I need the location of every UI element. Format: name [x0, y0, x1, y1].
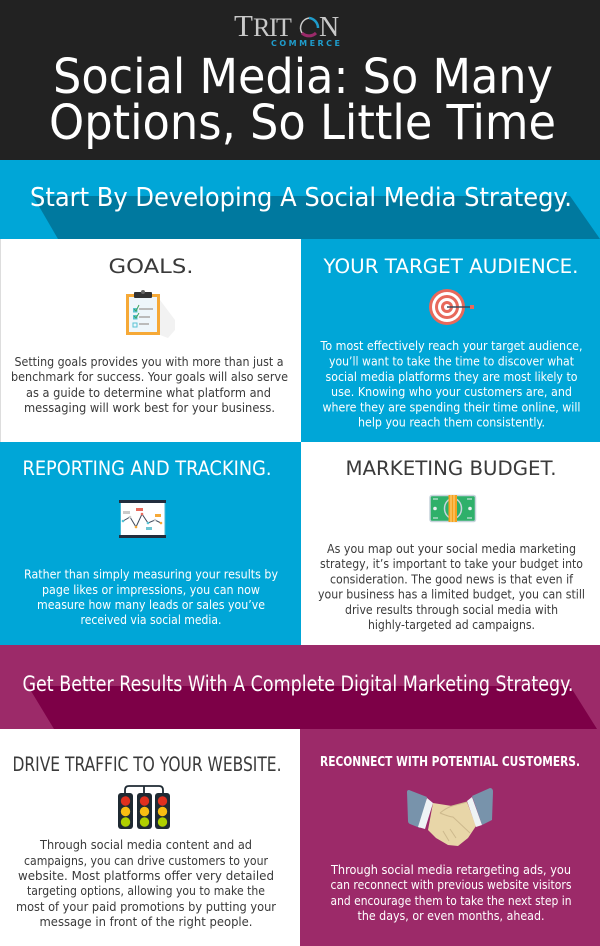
text: reporting and tracking: measure how many leads or sales you’ve [37, 597, 265, 612]
text: goals: benchmark for success. Your goals will also serve [11, 369, 288, 384]
text: drive traffic: campaigns, you can drive customers to your [24, 853, 269, 868]
panel: drive traffic [0, 729, 300, 946]
panel: target audience [301, 239, 600, 442]
text: marketing budget: As you map out your social media marketing [327, 541, 576, 556]
banner: digital marketing [0, 645, 600, 729]
logo: N [319, 12, 339, 43]
panel: reconnect [300, 729, 600, 946]
text: target audience [320, 338, 582, 430]
text: reconnect [330, 862, 572, 923]
logo: RIT [253, 13, 292, 42]
text: marketing budget: consideration. The good news is that even if [330, 572, 574, 586]
panel: marketing budget [301, 442, 600, 645]
heading: marketing budget: MARKETING BUDGET. [346, 457, 556, 480]
logo: T [234, 8, 253, 43]
text: drive traffic: most of your paid promotions by putting your [16, 899, 277, 914]
text: reporting and tracking [24, 566, 279, 627]
icon: handshake [407, 788, 493, 846]
title: Options, So Little Time [49, 95, 556, 151]
text: drive traffic: message in front of the right people. [40, 914, 252, 929]
icon: traffic lights [118, 786, 170, 829]
text: reporting and tracking: Rather than simply measuring your results by [24, 566, 279, 582]
heading: reporting and tracking: REPORTING AND TRACKING. [22, 457, 272, 480]
text: reporting and tracking: received via social media. [80, 612, 222, 627]
banner: strategy: Start By Developing A Social Media Strategy. [30, 183, 572, 213]
text: reconnect: the days, or even months, ahead. [358, 908, 544, 923]
title: Social Media: So Many [53, 49, 553, 105]
text: marketing budget: highly-targeted ad campaigns. [368, 617, 535, 632]
text: drive traffic: website. Most platforms offer very detailed [18, 868, 274, 883]
icon: target [429, 289, 474, 325]
text: goals [11, 354, 288, 415]
heading: goals: GOALS. [108, 255, 194, 278]
text: drive traffic [16, 837, 277, 929]
text: target audience: use. Knowing who your customers are, and [331, 384, 572, 399]
panel: reporting and tracking [0, 442, 301, 645]
text: drive traffic: targeting options, allowing you to make the [27, 883, 265, 898]
title [49, 49, 556, 151]
text: reporting and tracking: page likes or impressions, you can now [42, 582, 260, 597]
text: reconnect: Through social media retargeting ads, you [330, 862, 571, 877]
text: goals: as a guide to determine what platform and [26, 385, 271, 400]
heading: target audience: YOUR TARGET AUDIENCE. [322, 255, 578, 278]
icon: chart board [119, 500, 166, 538]
text: goals: Setting goals provides you with more than just a [14, 354, 284, 369]
icon: clipboard [126, 290, 175, 338]
text: marketing budget [318, 541, 585, 632]
text: drive traffic: Through social media content and ad [39, 837, 252, 852]
text: target audience: help you reach them consistently. [358, 414, 545, 430]
logo [234, 8, 340, 48]
panel: goals [0, 239, 301, 442]
text: marketing budget: drive results through social media with [345, 602, 558, 617]
text: goals: messaging will work best for your business. [24, 400, 275, 415]
logo: COMMERCE [271, 39, 340, 48]
header [0, 0, 600, 160]
icon: money [430, 495, 476, 522]
heading: drive traffic: DRIVE TRAFFIC TO YOUR WEBSITE. [12, 753, 282, 776]
banner: strategy [0, 160, 600, 239]
